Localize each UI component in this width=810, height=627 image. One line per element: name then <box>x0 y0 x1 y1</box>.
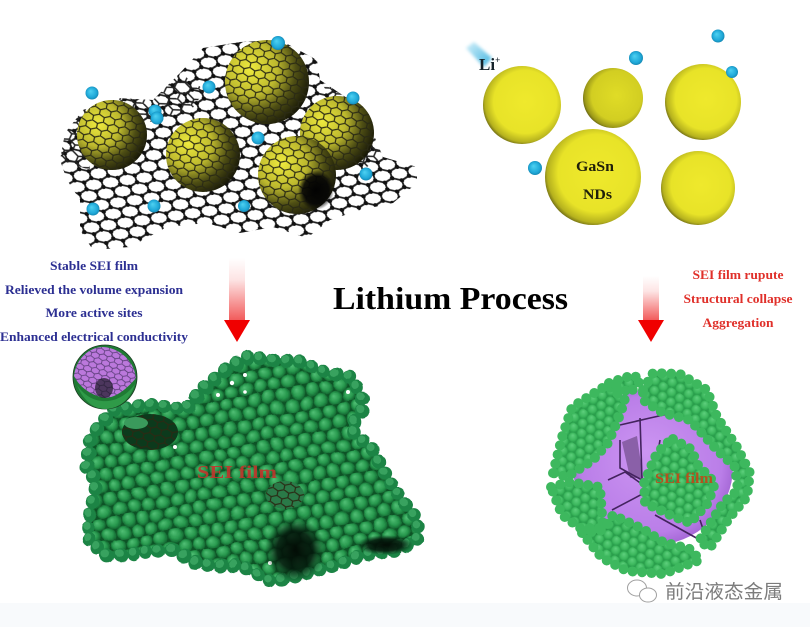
panel: bare GaSn nanodots <box>466 30 741 225</box>
arrow: left down <box>224 258 250 342</box>
watermark <box>628 580 783 603</box>
right failure text <box>684 268 793 330</box>
shadow right edge <box>357 535 413 555</box>
green sphere mass <box>86 355 418 582</box>
green SEI fragments <box>551 373 750 574</box>
left benefits text: Relieved the volume expansion <box>5 283 183 297</box>
purple fractured core <box>573 389 733 545</box>
label: Li+: Li <box>479 55 495 74</box>
label: GaSn: GaSn <box>576 159 615 175</box>
lithium ions <box>86 36 372 216</box>
inset: coated sphere <box>73 345 137 409</box>
label: NDs: NDs <box>583 187 612 203</box>
exposed graphene patch lower <box>266 481 304 509</box>
icon: chat bubbles <box>628 580 656 602</box>
left benefits text <box>0 259 189 344</box>
left benefits text: Stable SEI film <box>50 259 139 273</box>
bottom band <box>0 603 810 627</box>
arrow: right down <box>638 276 664 342</box>
exposed graphene patch upper <box>122 414 178 450</box>
lithium ions <box>528 30 738 175</box>
yellow spheres <box>483 64 741 225</box>
panel: SEI-coated graphene composite <box>86 355 418 582</box>
watermark text: 前沿液态金属 <box>665 581 783 603</box>
label: SEI film: SEI film <box>197 462 277 482</box>
graphene sheet <box>60 40 417 250</box>
left benefits text: Enhanced electrical conductivity <box>0 330 189 344</box>
lithium ion trail <box>466 42 492 67</box>
panel: collapsed nanodot with fractured SEI <box>551 373 750 574</box>
right failure text: Structural collapse <box>684 292 793 306</box>
encapsulated nanodots <box>77 40 374 214</box>
label: SEI film: SEI film <box>655 471 714 487</box>
label: Li+: + <box>495 55 500 65</box>
right failure text: Aggregation <box>702 316 774 330</box>
shadow fold <box>265 518 325 582</box>
left benefits text: More active sites <box>46 306 143 320</box>
right failure text: SEI film rupute <box>692 268 784 282</box>
gaps between spheres <box>173 373 350 565</box>
panel: graphene sheet with GaSn nanodots <box>60 36 417 250</box>
title: Lithium Process <box>333 280 568 316</box>
